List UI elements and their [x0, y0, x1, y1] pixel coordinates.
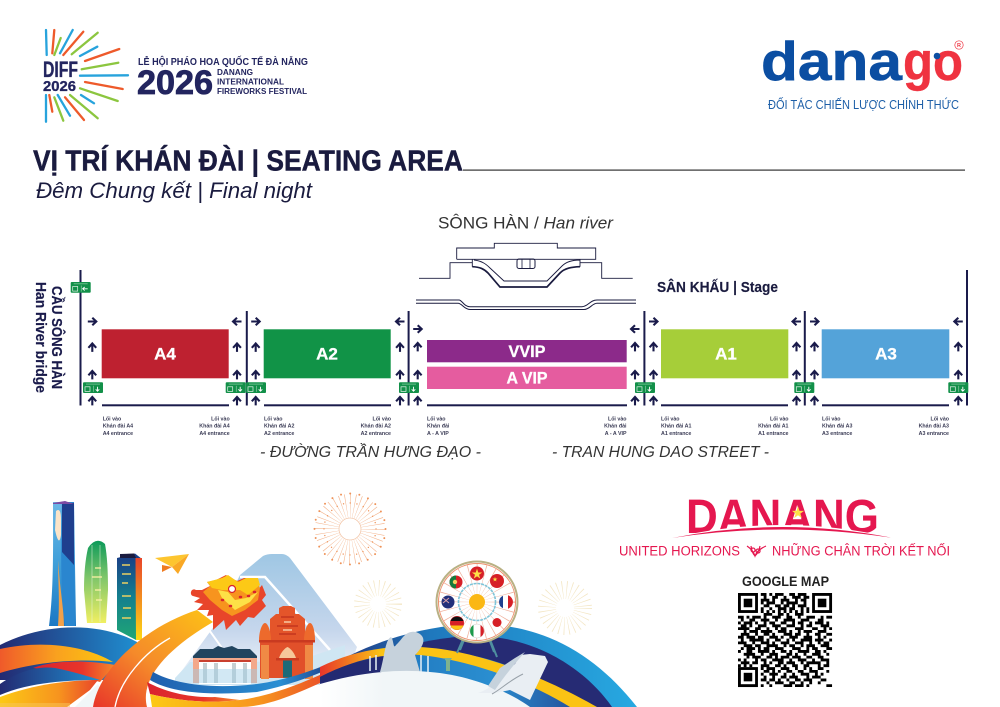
seating zone A VIP: [427, 367, 627, 389]
entrance labels: Lối vào: [211, 415, 230, 422]
festival name: 2026: [137, 64, 213, 102]
entrance labels: Lối vào: [103, 415, 122, 422]
seating zone A VIP: A VIP: [506, 370, 548, 388]
festival name: LỄ HỘI PHÁO HOA QUỐC TẾ ĐÀ NẴNG: [138, 54, 308, 68]
ribbon band orange: [0, 645, 113, 673]
logo mark text: 2026: [43, 79, 76, 95]
icon: ferris wheel with flags: [436, 562, 518, 657]
festival name: FIREWORKS FESTIVAL: [217, 87, 307, 96]
entrance labels: Lối vào: [822, 415, 841, 422]
seating zone A3: [822, 329, 949, 378]
partner caption: ĐỐI TÁC CHIẾN LƯỢC CHÍNH THỨC: [768, 97, 959, 112]
entrance labels: A - A VIP: [427, 431, 449, 437]
icon: paper plane: [155, 554, 189, 574]
icon: tagline butterfly: [747, 546, 766, 556]
icon: Hoi An bridge: [193, 646, 257, 684]
flag Vietnam: ★: [472, 568, 482, 580]
white ground: [320, 671, 530, 707]
wordmark: R: [957, 43, 961, 49]
river label: SÔNG HÀN / Han river: [438, 214, 615, 232]
icon: tower three: [117, 554, 142, 640]
wordmark: [761, 30, 963, 92]
seating zone A2: [264, 329, 391, 378]
illustration: Da Nang skyline and festival scene: [0, 494, 637, 707]
entrance labels: Khán đài A4: [103, 424, 133, 430]
entrance labels: Khán đài A3: [919, 424, 949, 430]
entrance labels: Khán đài: [604, 424, 627, 430]
entrance labels: Khán đài A1: [661, 424, 691, 430]
danago partner logo: [761, 30, 963, 112]
seating zone A3: A3: [875, 344, 897, 364]
festival name: [137, 54, 308, 102]
title: [33, 146, 965, 203]
icon: tower two: [84, 541, 108, 623]
entrance labels: Khán đài A3: [822, 424, 852, 430]
entrance labels: Lối vào: [264, 415, 283, 422]
title: VỊ TRÍ KHÁN ĐÀI | SEATING AREA: [33, 146, 463, 178]
icon: fireworks: [314, 494, 583, 626]
logo mark text: [43, 57, 78, 95]
entrance labels: A2 entrance: [361, 431, 391, 437]
entrance labels: Lối vào: [427, 415, 446, 422]
icon: left hand: [380, 632, 423, 672]
street labels: [260, 444, 769, 461]
flag Italy: [470, 624, 484, 638]
seating zone A1: A1: [715, 344, 737, 364]
QR code: [738, 594, 832, 686]
bridge label: Han River bridge: [32, 282, 48, 393]
mountain backdrop: [175, 554, 357, 680]
big dome: [320, 624, 637, 707]
icon: firework rays: [46, 30, 128, 122]
icons: green exit signs: [71, 282, 968, 393]
ribbon band red: [33, 662, 115, 682]
icon: Cham tower: [259, 606, 315, 679]
seating zone A4: A4: [154, 344, 176, 364]
entrance labels: Khán đài A2: [264, 424, 294, 430]
flag France: [499, 595, 513, 609]
dome columns: [370, 655, 428, 672]
flag Portugal: [450, 576, 462, 588]
title: Đêm Chung kết | Final night: [36, 178, 314, 203]
wordmark: ★: [791, 505, 805, 520]
DIFF 2026 festival logo: [43, 30, 308, 122]
festival name: INTERNATIONAL: [217, 78, 284, 86]
entrance labels: Lối vào: [372, 415, 392, 422]
entrance labels: A3 entrance: [919, 431, 949, 437]
seating barriers: [80, 270, 968, 406]
arrows: walkways: [88, 318, 963, 405]
right lower ribbons: [150, 661, 335, 694]
entrance labels: Lối vào: [770, 415, 789, 422]
tagline: UNITED HORIZONS: [619, 544, 740, 558]
ribbon band blue: [0, 668, 100, 695]
flag China: ★: [492, 577, 498, 583]
entrance labels: A1 entrance: [661, 431, 691, 437]
bridge label: CẦU SÔNG HÀN: [48, 286, 66, 389]
icon: right hand: [478, 652, 548, 700]
entrance labels: A3 entrance: [822, 431, 852, 437]
entrance labels: A4 entrance: [199, 431, 230, 437]
left hill: [0, 627, 137, 680]
seating zone VVIP: [427, 340, 627, 362]
ribbon to dragon: [93, 610, 213, 707]
flag Australia: [442, 596, 454, 608]
seating zone A1: [661, 329, 788, 378]
Google map heading: GOOGLE MAP: [742, 574, 829, 589]
entrance labels: Khán đài: [427, 424, 450, 430]
stage label: SÂN KHẤU | Stage: [657, 278, 778, 296]
tagline: NHỮNG CHÂN TRỜI KẾT NỐI: [772, 544, 950, 558]
entrance labels: A4 entrance: [103, 431, 133, 437]
bridge label: [32, 282, 66, 393]
entrance labels: A - A VIP: [605, 431, 627, 437]
flag Japan: [492, 618, 502, 627]
flag Germany: [450, 616, 464, 630]
ribbon band yellow: [0, 680, 98, 707]
entrance labels: Khán đài A1: [758, 424, 789, 430]
entrance labels: A1 entrance: [758, 431, 789, 437]
entrance labels: Lối vào: [608, 415, 627, 422]
seating zone A4: [102, 329, 229, 378]
festival name: DANANG: [217, 68, 253, 77]
stage diagram: [416, 243, 636, 310]
entrance labels: [103, 415, 950, 437]
tagline: [619, 544, 950, 558]
seating zone VVIP: VVIP: [508, 343, 546, 361]
DANANG destination logo: [619, 491, 950, 558]
water wash: [175, 645, 345, 685]
street labels: - TRAN HUNG DAO STREET -: [552, 444, 769, 461]
icon: tower one: [49, 501, 76, 626]
wordmark: DANANG: [686, 491, 879, 544]
entrance labels: A2 entrance: [264, 431, 294, 437]
icon: dragon head: [191, 575, 266, 630]
dome yellow ribbon: [320, 647, 597, 707]
entrance labels: Khán đài A2: [361, 424, 391, 430]
wordmark: go: [903, 32, 963, 92]
logo mark text: DIFF: [43, 57, 78, 82]
entrance labels: Lối vào: [930, 415, 950, 422]
wordmark: dana: [761, 30, 902, 92]
entrance labels: Khán đài A4: [199, 424, 230, 430]
entrance labels: Lối vào: [661, 415, 680, 422]
street labels: - ĐƯỜNG TRẦN HƯNG ĐẠO -: [260, 444, 481, 461]
seating zone A2: A2: [316, 344, 338, 364]
